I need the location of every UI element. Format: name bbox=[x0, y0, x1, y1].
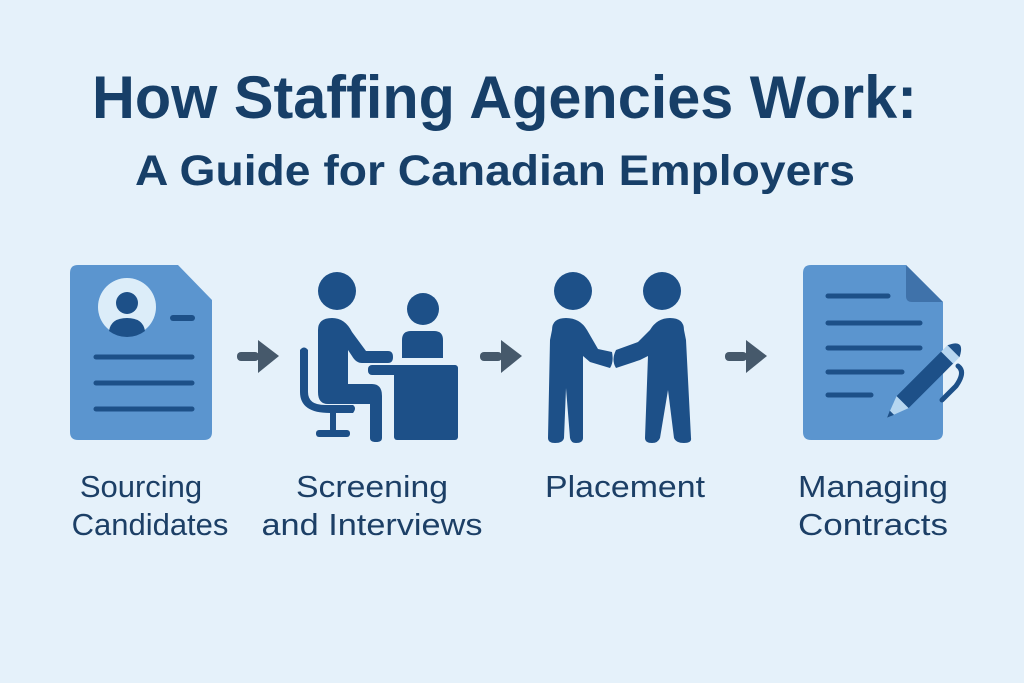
arrow 1 bbox=[237, 340, 279, 373]
label: screening and interviews: Screening bbox=[296, 469, 448, 504]
label: managing contracts bbox=[798, 469, 948, 542]
label: sourcing candidates: Sourcing bbox=[80, 469, 202, 504]
label: sourcing candidates bbox=[72, 469, 228, 542]
label: managing contracts: Managing bbox=[798, 469, 948, 504]
subtitle: A Guide for Canadian Employers bbox=[135, 147, 855, 195]
icon: resume document bbox=[70, 265, 212, 440]
label: screening and interviews: and Interviews bbox=[262, 507, 482, 542]
arrow 2 bbox=[480, 340, 522, 373]
icon: interview bbox=[300, 272, 458, 442]
title: How Staffing Agencies Work: bbox=[92, 64, 917, 131]
label: managing contracts: Contracts bbox=[798, 507, 948, 542]
label: screening and interviews bbox=[262, 469, 482, 542]
arrow 3 bbox=[725, 340, 767, 373]
icon: contract with pen bbox=[803, 265, 966, 440]
label: sourcing candidates: Candidates bbox=[72, 507, 228, 542]
label: placement: Placement bbox=[545, 469, 705, 504]
icon: handshake bbox=[548, 272, 691, 443]
